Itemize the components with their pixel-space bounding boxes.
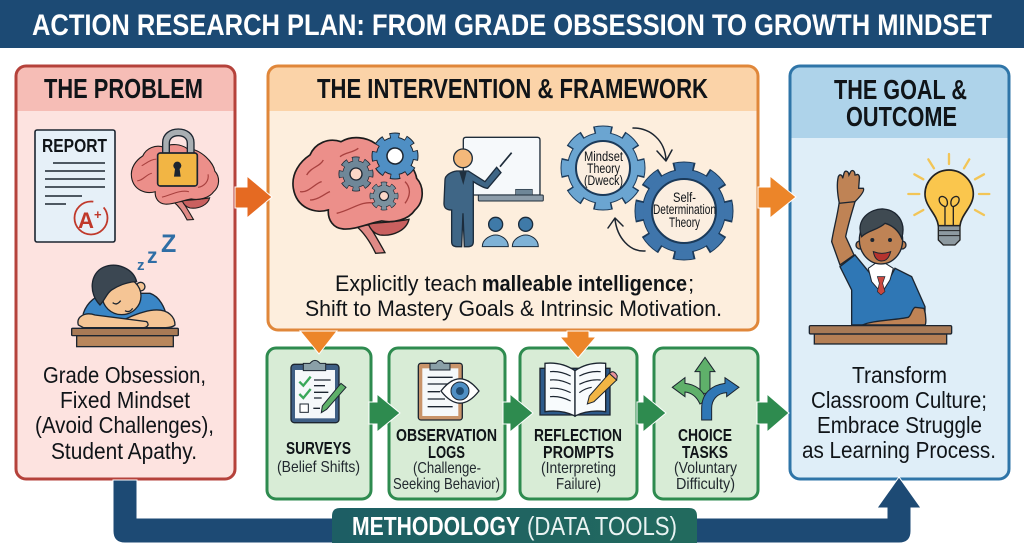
arrow: intervention to reflection xyxy=(560,331,596,358)
icon: report card: A xyxy=(78,208,94,233)
text: surveys label xyxy=(277,438,360,476)
icon: zzz: z xyxy=(147,245,158,268)
text: reflection label: (Interpreting xyxy=(541,460,616,477)
text: problem description: Grade Obsession, xyxy=(43,362,206,388)
arrow: choice to goal xyxy=(757,394,789,432)
text: problem description xyxy=(35,362,214,464)
icon: report card xyxy=(35,130,115,242)
text: choice label: CHOICE xyxy=(678,425,732,445)
text: reflection label: Failure) xyxy=(556,476,601,493)
icon: brain with gears xyxy=(293,128,423,253)
gear labels: Mindset xyxy=(584,149,623,164)
icon: locked brain xyxy=(131,129,219,220)
icon: branching arrows xyxy=(672,357,739,420)
icon: teacher at whiteboard xyxy=(444,137,543,247)
text: observation label xyxy=(393,425,500,493)
text: choice label: TASKS xyxy=(682,442,728,462)
text: observation label: Seeking Behavior) xyxy=(393,476,500,493)
gear labels: Self- xyxy=(673,190,696,205)
card: observation logs xyxy=(389,348,505,499)
gear labels: (Dweck) xyxy=(584,173,623,188)
icon: zzz xyxy=(137,230,176,274)
heading: goal xyxy=(834,74,967,132)
text: problem description: Student Apathy. xyxy=(51,438,197,464)
card: reflection prompts xyxy=(520,348,637,499)
text: intervention description: Shift to Mastery Goals & Intrinsic Motivation. xyxy=(305,296,722,321)
text: choice label: (Voluntary xyxy=(674,460,737,477)
text: choice label xyxy=(674,425,737,493)
text: goal description: Transform xyxy=(852,362,947,388)
icon: book and pencil xyxy=(540,363,617,416)
icon: zzz: Z xyxy=(161,230,176,258)
panel: the goal and outcome xyxy=(790,66,1009,479)
arrow: reflection to choice xyxy=(637,394,666,432)
text: reflection label: PROMPTS xyxy=(543,442,614,462)
icon: student raising hand xyxy=(809,171,952,344)
icon: sleeping student xyxy=(72,265,178,347)
icon: framework gears xyxy=(550,115,746,273)
banner: methodology label: METHODOLOGY xyxy=(352,511,520,541)
heading: goal: THE GOAL & xyxy=(834,74,967,105)
heading: goal: OUTCOME xyxy=(846,101,957,132)
arrow: observation to reflection xyxy=(503,394,533,432)
title banner xyxy=(0,0,1024,48)
icon: clipboard with eye xyxy=(418,360,479,420)
icon: zzz: z xyxy=(137,257,144,274)
text: goal description: Classroom Culture; xyxy=(811,387,987,413)
heading: intervention: THE INTERVENTION & FRAMEWORK xyxy=(317,73,708,104)
icon: report card: REPORT xyxy=(42,136,107,156)
text: surveys label: SURVEYS xyxy=(286,438,351,458)
banner: methodology label xyxy=(332,508,697,543)
gear labels: Determination xyxy=(653,202,716,217)
text: intervention description: malleable intelligence xyxy=(482,271,687,296)
banner: methodology label: (DATA TOOLS) xyxy=(527,511,677,541)
icon: report card: + xyxy=(94,207,102,222)
text: reflection label xyxy=(534,425,622,493)
arrow: surveys to observation xyxy=(369,394,400,432)
text: goal description: as Learning Process. xyxy=(802,437,996,463)
card: choice tasks xyxy=(654,348,758,499)
text: intervention description: ; xyxy=(688,271,694,296)
text: surveys label: (Belief Shifts) xyxy=(277,459,360,476)
text: observation label: OBSERVATION xyxy=(396,425,497,445)
text: goal description xyxy=(802,362,996,463)
text: observation label: LOGS xyxy=(428,442,465,462)
gear labels: Theory xyxy=(669,215,700,230)
icon: light bulb xyxy=(908,154,989,245)
panel: the problem xyxy=(16,66,235,479)
arrow: methodology path to goal xyxy=(113,477,921,543)
text: reflection label: REFLECTION xyxy=(534,425,622,445)
text: problem description: (Avoid Challenges), xyxy=(35,412,214,438)
text: goal description: Embrace Struggle xyxy=(817,412,982,438)
arrow: problem to intervention xyxy=(235,176,272,218)
panel: the intervention and framework xyxy=(268,66,758,330)
text: intervention description: Explicitly teach xyxy=(335,271,477,296)
gear labels xyxy=(584,149,716,230)
icon: survey clipboard xyxy=(291,360,346,423)
text: problem description: Fixed Mindset xyxy=(60,387,191,413)
arrow: intervention to surveys xyxy=(300,331,337,354)
heading: the problem: THE PROBLEM xyxy=(44,73,203,104)
gear labels: Theory xyxy=(587,161,620,176)
arrow: intervention to goal xyxy=(758,176,796,218)
card: surveys xyxy=(267,348,371,499)
text: choice label: Difficulty) xyxy=(676,476,735,493)
text: observation label: (Challenge- xyxy=(413,460,481,477)
text: intervention description xyxy=(305,271,722,321)
